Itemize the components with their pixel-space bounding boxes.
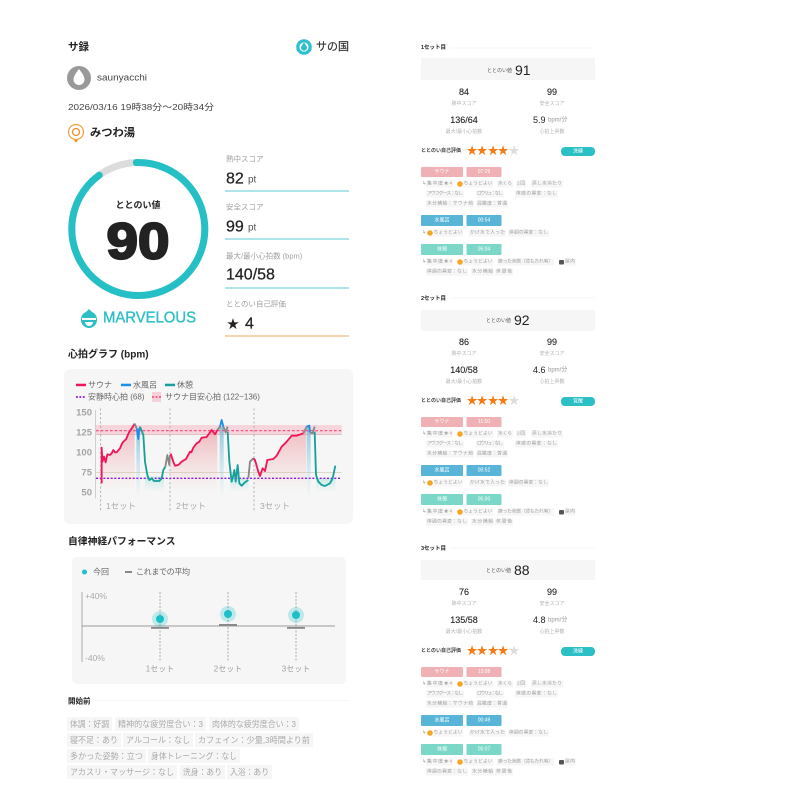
set 2 rest: ↳ (422, 508, 426, 514)
set 2 score box: ととのい値 (486, 317, 511, 324)
set 2 cold bath: ちょうどよい (434, 478, 463, 486)
set labels: 2セット (176, 501, 206, 511)
y axis labels: 75 (81, 468, 93, 478)
set 1 point (146, 592, 174, 674)
set 3 metrics: 4.8 (533, 615, 546, 625)
set 3 sauna: アウフグース：なし (427, 690, 463, 696)
set 2 sauna: ちょうどよい (464, 430, 493, 436)
set 2 metrics: 99 (547, 337, 557, 347)
set 3 point: 3セット (282, 664, 310, 674)
set 3 self rating: ★ (466, 643, 478, 659)
set 3 rest: 水分補給 (472, 768, 493, 774)
set 1 point: 1セット (146, 664, 174, 674)
chart legend (76, 380, 260, 402)
set 1 self rating: ★ (487, 143, 499, 159)
set 1 metrics: bpm/分 (548, 116, 567, 124)
set 3 rest: 休憩 (437, 746, 447, 752)
set 3 score box (421, 560, 595, 580)
set 3 self rating: ととのい自己評価 (421, 647, 461, 654)
set 2 sauna: 集中度★4 (427, 430, 452, 436)
set 2 rest: 体調の異変：なし (427, 518, 467, 524)
set 1 rest: 休憩後 (496, 268, 512, 274)
set 2 rest: 座った状態（背もたれ有） (498, 508, 553, 514)
set 2 rest: 休憩後 (496, 518, 512, 524)
metric: safety score: 安全スコア (226, 202, 264, 212)
set 1 self rating (421, 143, 595, 159)
set 1 rest: 水分補給 (472, 268, 493, 274)
set 3 metrics: 安全スコア (539, 600, 565, 607)
set 3 cold bath: かけ水で入った (470, 728, 505, 736)
set 3 sauna: 集中度★4 (427, 680, 452, 686)
performance legend (82, 566, 190, 576)
chips: condition before start: 体調：好調 (70, 719, 109, 729)
set 1 sauna: ↳ (422, 180, 426, 186)
chips: condition before start: 肉体的な疲労度合い：3 (212, 719, 296, 729)
set 1 rest: 座った状態（背もたれ有） (498, 258, 553, 264)
set 3 self rating: ★ (487, 643, 499, 659)
score ring (72, 162, 205, 296)
panel: set 3: 3セット目 (421, 545, 446, 552)
set 1 rest: 05:04 (478, 246, 490, 252)
set 2 sauna: 水くら (498, 430, 512, 436)
set 1 self rating: ★ (497, 143, 509, 159)
set 3 rest (421, 744, 576, 776)
axis and labels: -40% (85, 653, 105, 663)
y axis labels: 125 (76, 428, 93, 438)
set 1 metrics: 安全スコア (539, 100, 565, 107)
set 3 self rating: 洗練 (573, 648, 583, 654)
chips: condition before start: 寝不足：あり (70, 735, 118, 745)
heading: before start: 開始前 (68, 696, 91, 706)
set 1 self rating: ととのい自己評価 (421, 147, 461, 154)
set 3 rest: ↳ (422, 758, 426, 764)
set 1 cold bath: 00:54 (478, 218, 490, 224)
set 1 score box: ととのい値 (487, 67, 512, 74)
set 2 self rating: ★ (487, 393, 499, 409)
panel: heart rate graph (64, 369, 353, 524)
panel: set 1 (421, 44, 595, 276)
chart legend: 水風呂 (133, 380, 157, 390)
set 1 sauna: 水分補給：サウナ前 (427, 200, 473, 206)
logo (298, 40, 349, 53)
set 2 self rating: ととのい自己評価 (421, 397, 461, 404)
set 2 sauna: ロウリュ：なし (477, 440, 503, 446)
set 2 sauna: 混雑度：普通 (477, 450, 507, 456)
set 2 metrics: 心拍上昇数 (539, 378, 565, 385)
set 3 metrics: 76 (459, 587, 469, 597)
set 1 self rating: ★ (466, 143, 478, 159)
set 2 sauna: 11:50 (478, 419, 490, 425)
set 1 metrics: 84 (459, 87, 469, 97)
set 2 cold bath (421, 465, 549, 486)
facility name: みつわ湯 (90, 125, 135, 139)
set 2 self rating: ★ (466, 393, 478, 409)
set 3 metrics: 99 (547, 587, 557, 597)
set 3 score box: ととのい値 (486, 567, 511, 574)
set 1 sauna: サウナ (434, 168, 450, 175)
performance legend: 今回 (93, 566, 109, 576)
set labels (106, 501, 290, 511)
set 2 rest: ちょうどよい (464, 508, 493, 514)
set 1 metrics: 熱中スコア (451, 100, 477, 107)
chart legend: 休憩 (177, 380, 193, 390)
user avatar and name (67, 66, 147, 90)
set 3 sauna: 体感の異変：なし (516, 690, 557, 696)
set 2 rest: 05:00 (478, 496, 490, 502)
metric: self rating: 4 (245, 316, 254, 332)
set 2 rest: 屋内 (565, 508, 575, 514)
set 2 sauna: 2回 (517, 430, 525, 436)
score ring: ととのい値 (116, 199, 160, 210)
set 3 cold bath: 体調の異変：なし (509, 728, 548, 736)
set 2 point: 2セット (214, 664, 242, 674)
set 2 cold bath: かけ水で入った (470, 478, 505, 486)
metric: heat score (225, 154, 349, 192)
set 2 self rating: 覚醒 (573, 398, 583, 404)
set 3 sauna: ↳ (422, 680, 426, 686)
set 1 sauna: 2回 (517, 180, 525, 186)
set 3 metrics: 熱中スコア (451, 600, 477, 607)
set 1 rest: ちょうどよい (464, 258, 493, 264)
set 3 sauna: 蒸し水冷たり (532, 680, 562, 686)
set 1 metrics: 5.9 (533, 115, 546, 125)
set 3 metrics: 最大/最小心拍数 (446, 628, 482, 635)
set 3 metrics: 135/58 (450, 615, 478, 625)
set 2 metrics: 最大/最小心拍数 (446, 378, 482, 385)
set 3 self rating (421, 643, 595, 659)
chips: condition before start: 身体トレーニング：なし (151, 751, 237, 761)
set 3 rest: 休憩後 (496, 768, 512, 774)
chart legend: 安静時心拍 (68) (88, 392, 145, 402)
set 3 rest: 集中度★4 (427, 758, 452, 764)
chips: condition before start: 多かった姿勢：立つ (70, 751, 143, 761)
set 2 rest: 集中度★4 (427, 508, 452, 514)
metric: max/min heart rate: 140/58 (226, 266, 275, 284)
set 1 score box (421, 58, 595, 80)
set 1 sauna: ロウリュ：なし (477, 190, 503, 196)
set 2 self rating: ★ (476, 393, 488, 409)
set 3 metrics: bpm/分 (548, 616, 567, 624)
set 2 sauna: 水分補給：サウナ前 (427, 450, 473, 456)
heading: heart rate graph: 心拍グラフ (bpm) (68, 348, 149, 360)
set 1 rest: 集中度★4 (427, 258, 452, 264)
set 3 sauna (421, 667, 563, 708)
metric: safety score: 99 (226, 218, 244, 236)
set 2 cold bath: ↳ (422, 480, 426, 486)
set 3 rest: 座った状態（背もたれ有） (498, 758, 553, 764)
set 1 cold bath: ↳ (422, 230, 426, 236)
set 3 cold bath: 00:49 (478, 718, 490, 724)
facility name (68, 124, 135, 143)
set 3 rest: 屋内 (565, 758, 575, 764)
set 1 self rating: ★ (476, 143, 488, 159)
y axis labels: 50 (81, 488, 92, 498)
set 1 sauna: 07:29 (478, 169, 490, 175)
set 2 metrics: 86 (459, 337, 469, 347)
set 3 sauna: ちょうどよい (464, 680, 493, 686)
set 1 cold bath: かけ水で入った (470, 228, 505, 236)
heading: autonomic performance: 自律神経パフォーマンス (68, 534, 176, 548)
axis and labels (82, 591, 335, 663)
rank badge: MARVELOUS (103, 310, 196, 326)
set 2 sauna (421, 417, 563, 458)
set labels: 3セット (260, 501, 290, 511)
user avatar and name: saunyacchi (97, 72, 147, 84)
set 2 sauna: 蒸し水冷たり (532, 430, 562, 436)
set 1 sauna: アウフグース：なし (427, 190, 463, 196)
set 3 sauna: 混雑度：普通 (477, 700, 507, 706)
set 1 sauna: ちょうどよい (464, 180, 493, 186)
metric: heat score: 熱中スコア (226, 154, 264, 164)
set 2 self rating (421, 393, 595, 409)
metric: heat score: 82 (226, 170, 244, 188)
panel: set 3 (421, 545, 595, 776)
set 2 cold bath: 体調の異変：なし (509, 478, 548, 486)
set 1 metrics (446, 87, 567, 135)
set 1 sauna (421, 167, 563, 208)
set 2 self rating: ★ (508, 393, 520, 409)
chips: condition before start: アルコール：なし (126, 735, 190, 745)
set 2 sauna: 体感の異変：なし (516, 440, 557, 446)
set 3 cold bath: ちょうどよい (434, 728, 463, 736)
set labels: 1セット (106, 501, 136, 511)
y axis labels (76, 408, 93, 498)
heart rate line chart (95, 408, 342, 512)
set 2 cold bath: 00:52 (478, 468, 490, 474)
chips: condition before start: カフェイン：少量,3時間より前 (198, 735, 310, 745)
set 2 point (214, 592, 242, 674)
set 3 cold bath (421, 715, 549, 736)
metric: safety score: pt (248, 222, 257, 234)
metric: self rating: ★ (226, 315, 240, 333)
set 1 sauna: 体感の異変：なし (516, 190, 557, 196)
set 3 metrics: 心拍上昇数 (539, 628, 565, 635)
set 1 metrics: 最大/最小心拍数 (446, 128, 482, 135)
set 1 metrics: 心拍上昇数 (539, 128, 565, 135)
set 1 cold bath: 体調の異変：なし (509, 228, 548, 236)
set 1 cold bath: ちょうどよい (434, 228, 463, 236)
set 3 metrics (446, 587, 567, 635)
set 3 rest: 05:07 (478, 746, 490, 752)
metric: self rating: ととのい自己評価 (226, 298, 286, 308)
set 3 sauna: 水くら (498, 680, 512, 686)
chart legend: サウナ目安心拍 (122~136) (165, 392, 260, 402)
set 2 metrics: 4.6 (533, 365, 546, 375)
set 3 sauna: ロウリュ：なし (477, 690, 503, 696)
set 3 self rating: ★ (508, 643, 520, 659)
set 2 score box (421, 310, 595, 331)
set 1 cold bath (421, 215, 549, 236)
chips: condition before start: 入浴：あり (230, 767, 269, 777)
chips: condition before start (67, 717, 313, 779)
set 2 sauna: アウフグース：なし (427, 440, 463, 446)
set 2 metrics: 熱中スコア (451, 350, 477, 357)
chart legend: サウナ (88, 380, 112, 390)
set 1 rest: 体調の異変：なし (427, 268, 467, 274)
metric: max/min heart rate: 最大/最小心拍数 (bpm) (226, 250, 303, 260)
set 2 rest: 水分補給 (472, 518, 493, 524)
set 3 point (282, 592, 310, 674)
set 1 sauna: 蒸し水冷たり (532, 180, 562, 186)
set 2 metrics (446, 337, 567, 385)
set 2 metrics: 140/58 (450, 365, 478, 375)
set 3 rest: ちょうどよい (464, 758, 493, 764)
chips: condition before start: アカスリ・マッサージ：なし (70, 767, 174, 777)
set 3 rest: 体調の異変：なし (427, 768, 467, 774)
logo: サの国 (316, 40, 349, 53)
metric: self rating (225, 298, 349, 336)
set 1 rest: 休憩 (437, 246, 447, 252)
set 1 cold bath: 水風呂 (434, 216, 450, 224)
set 2 metrics: 安全スコア (539, 350, 565, 357)
metric: heat score: pt (248, 174, 257, 186)
set 3 cold bath: 水風呂 (434, 716, 450, 724)
rank badge (81, 309, 196, 328)
set 2 rest: 休憩 (437, 496, 447, 502)
set 1 score box: 91 (515, 62, 531, 78)
y axis labels: 150 (76, 408, 92, 418)
set 3 score box: 88 (514, 562, 530, 578)
set 3 self rating: ★ (497, 643, 509, 659)
title: サ録 (68, 40, 89, 53)
performance legend: これまでの平均 (136, 566, 190, 576)
score ring: 90 (106, 212, 170, 270)
panel: set 1: 1セット目 (421, 44, 446, 51)
panel: set 2: 2セット目 (421, 295, 446, 302)
set 2 sauna: ↳ (422, 430, 426, 436)
set 3 cold bath: ↳ (422, 730, 426, 736)
axis and labels: +40% (85, 591, 107, 601)
set 2 metrics: bpm/分 (548, 366, 567, 374)
set 1 rest (421, 244, 576, 276)
set 2 score box: 92 (514, 312, 530, 328)
set 3 sauna: サウナ (434, 668, 450, 675)
set 1 metrics: 136/64 (450, 115, 478, 125)
set 2 sauna: サウナ (434, 418, 450, 425)
set 1 self rating: 洗練 (573, 148, 583, 154)
y axis labels: 100 (76, 448, 92, 458)
set 3 sauna: 2回 (517, 680, 525, 686)
set 2 self rating: ★ (497, 393, 509, 409)
set 2 rest (421, 494, 576, 526)
chips: condition before start: 精神的な疲労度合い：3 (118, 719, 203, 729)
metric: safety score (225, 202, 349, 240)
metric: max/min heart rate (225, 250, 349, 288)
set 1 rest: ↳ (422, 258, 426, 264)
set 1 sauna: 集中度★4 (427, 180, 452, 186)
set 1 rest: 屋内 (565, 258, 575, 264)
chips: condition before start: 洗身：あり (183, 767, 222, 777)
panel: set 2 (421, 295, 595, 526)
date and time: 2026/03/16 19時38分～20時34分 (68, 102, 215, 112)
set 1 sauna: 水くら (498, 180, 512, 186)
set 1 self rating: ★ (508, 143, 520, 159)
panel: autonomic performance (72, 557, 346, 684)
set 3 sauna: 12:08 (478, 669, 490, 675)
set 3 sauna: 水分補給：サウナ前 (427, 700, 473, 706)
set 1 sauna: 混雑度：普通 (477, 200, 507, 206)
set 2 cold bath: 水風呂 (434, 466, 450, 474)
set 3 self rating: ★ (476, 643, 488, 659)
set 1 metrics: 99 (547, 87, 557, 97)
